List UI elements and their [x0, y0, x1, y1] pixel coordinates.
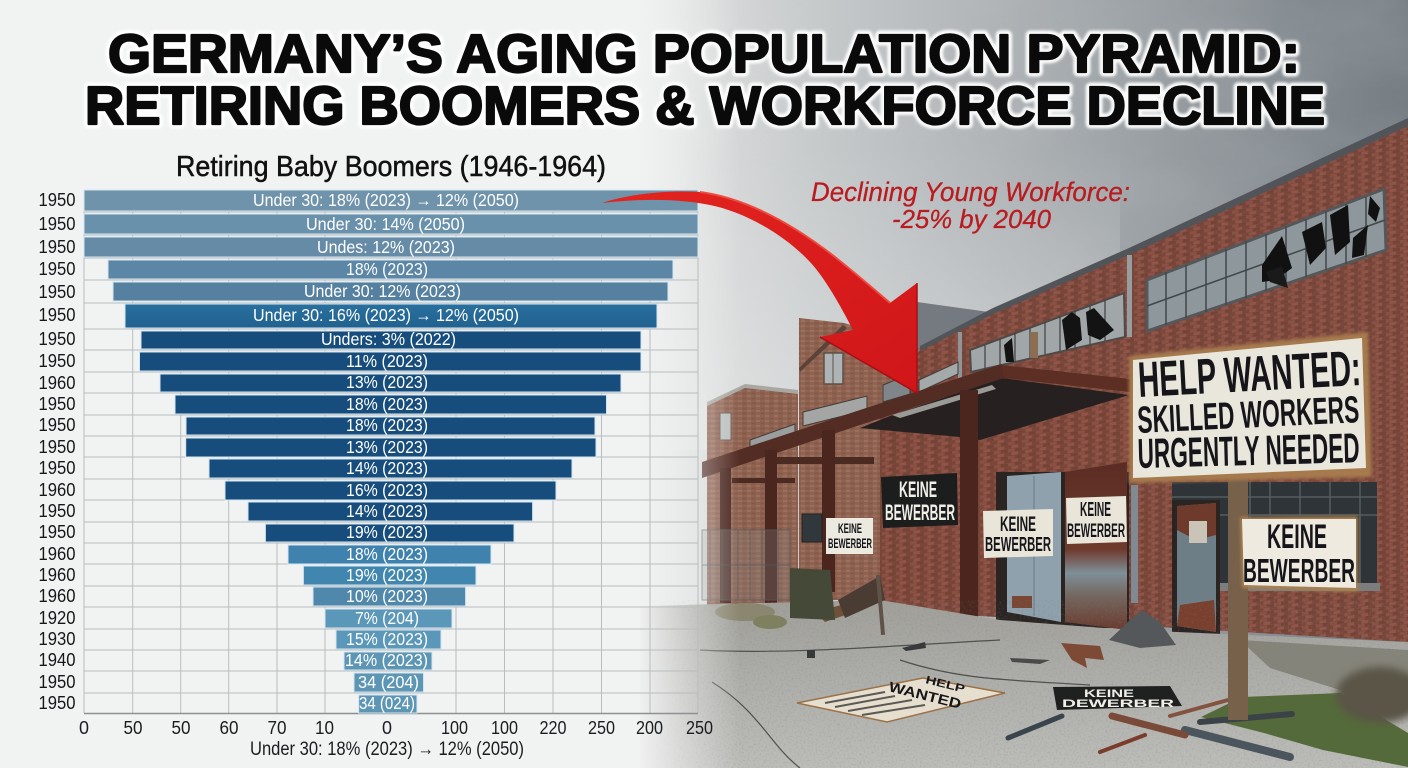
grass strip: [1201, 640, 1408, 767]
year labels: 1950: [38, 672, 76, 692]
year labels: 1950: [38, 522, 76, 542]
pyramid bars: [84, 190, 698, 713]
main brick facade: [880, 118, 1408, 642]
year labels: 1960: [38, 586, 76, 606]
callout: declining young workforce: -25% by 2040: [892, 204, 1052, 234]
concrete ground: [640, 600, 1408, 768]
fallen help wanted sign: WANTED: [887, 678, 963, 712]
x axis labels: 100: [491, 718, 518, 738]
dark grid window lower right: [1172, 482, 1380, 591]
keine bewerber sign on post: [1240, 516, 1358, 592]
callout: declining young workforce: Declining Young Workforce:: [811, 177, 1130, 207]
fallen keine bewerber sign: [1053, 686, 1182, 710]
side door: [1172, 500, 1220, 634]
fallen keine bewerber sign: DEWERBER: [1062, 698, 1174, 710]
year labels: 1960: [38, 565, 76, 585]
year labels: 1950: [38, 437, 76, 457]
x axis labels: 0: [79, 718, 89, 738]
chart heading: Retiring Baby Boomers (1946-1964): [176, 151, 606, 183]
fallen help wanted sign: HELP: [924, 674, 966, 696]
year labels: 1950: [38, 214, 76, 234]
x axis labels: 10: [315, 718, 334, 738]
year labels: 1950: [38, 693, 76, 713]
year labels: 1950: [38, 415, 76, 435]
callout: declining young workforce: [811, 177, 1130, 234]
bar labels: Under 30: 14% (2050): [306, 214, 465, 234]
year labels: 1950: [38, 190, 76, 210]
small keine bewerber sign: KEINE: [838, 520, 862, 536]
fallen keine bewerber sign: KEINE: [1084, 688, 1134, 700]
rusted steel canopy: [702, 364, 1130, 483]
year labels: 1950: [38, 282, 76, 302]
lower small window: [802, 514, 822, 542]
drain pipes: [1127, 255, 1132, 337]
x axis labels: 0: [382, 718, 392, 738]
bar labels: 19% (2023): [346, 565, 428, 585]
keine bewerber sign on post: KEINE: [1267, 518, 1327, 556]
door keine bewerber sign right: KEINE: [1080, 499, 1111, 521]
panel: chart background fade: [0, 0, 740, 768]
dark keine bewerber sign: KEINE: [899, 477, 937, 502]
year labels: 1950: [38, 394, 76, 414]
small keine bewerber sign: BEWERBER: [828, 535, 872, 551]
x axis labels: 50: [172, 718, 190, 738]
scattered tools: [1008, 700, 1292, 757]
axis caption: Under 30: 18% (2023) → 12% (2050): [250, 739, 524, 760]
x axis labels: 250: [588, 718, 615, 738]
small keine bewerber sign: [826, 518, 873, 554]
title: GERMANY’S AGING POPULATION PYRAMID:: [108, 24, 1300, 84]
small windows left wing: [710, 362, 958, 468]
title: [85, 24, 1325, 136]
x axis labels: [79, 718, 713, 738]
broken middle window: [970, 293, 1125, 372]
canopy posts: [720, 390, 978, 644]
year labels: 1950: [38, 351, 76, 371]
doors: [996, 462, 1129, 630]
bar labels: 7% (204): [355, 608, 419, 628]
bar labels: Unders: 3% (2022): [321, 329, 456, 349]
middle gabled building: [799, 302, 989, 600]
title: RETIRING BOOMERS & WORKFORCE DECLINE: [85, 76, 1325, 136]
bar labels: 15% (2023): [346, 629, 428, 649]
x axis labels: 50: [124, 718, 142, 738]
bar labels: 10% (2023): [346, 586, 428, 606]
year labels: 1930: [38, 629, 76, 649]
bar labels: 11% (2023): [346, 351, 428, 371]
year labels: 1950: [38, 501, 76, 521]
door keine bewerber sign right: BEWERBER: [1067, 521, 1125, 542]
bar labels: Under 30: 12% (2023): [304, 281, 461, 301]
x axis labels: 250: [686, 718, 713, 738]
bar labels: 19% (2023): [346, 522, 428, 542]
bar labels: 34 (024): [359, 693, 415, 713]
bar labels: 18% (2023): [346, 259, 428, 279]
chart grid lines: [84, 190, 698, 714]
door keine bewerber sign right: [1066, 496, 1127, 544]
bar labels: 16% (2023): [346, 480, 428, 500]
bar labels: 18% (2023): [346, 544, 428, 564]
bar labels: Under 30: 18% (2023) → 12% (2050): [253, 190, 519, 210]
year labels: 1940: [38, 650, 76, 670]
door keine bewerber sign: KEINE: [1000, 513, 1036, 536]
bar labels: 14% (2023): [345, 650, 428, 670]
x axis labels: 220: [540, 718, 566, 738]
dark keine bewerber sign: [881, 473, 958, 528]
x axis labels: 60: [220, 718, 238, 738]
title: RETIRING BOOMERS & WORKFORCE DECLINE: [85, 76, 1325, 136]
fence: [702, 530, 790, 600]
year labels: 1950: [38, 259, 76, 279]
year labels: 1950: [38, 305, 76, 325]
fallen help wanted sign: [797, 674, 1005, 722]
lower wall: [880, 395, 1129, 610]
far left building: [707, 384, 798, 610]
year labels: 1960: [38, 373, 76, 393]
population pyramid chart: [38, 190, 713, 760]
year labels: 1960: [38, 544, 76, 564]
roof gutter: [920, 118, 1408, 351]
dark keine bewerber sign: BEWERBER: [885, 500, 955, 525]
sign post: [1228, 478, 1248, 720]
x axis labels: 70: [268, 718, 286, 738]
title: GERMANY’S AGING POPULATION PYRAMID:: [108, 24, 1300, 84]
panel: photo of abandoned factory: [646, 0, 1408, 768]
door keine bewerber sign: [983, 509, 1053, 558]
bar labels: 18% (2023): [346, 415, 428, 435]
year labels: [38, 190, 76, 713]
help wanted main sign: [1129, 332, 1372, 483]
x axis labels: 200: [636, 718, 663, 738]
bar labels: 13% (2023): [346, 372, 428, 392]
year labels: 1920: [38, 608, 76, 628]
year labels: 1950: [38, 237, 76, 257]
bar labels: Under 30: 16% (2023) → 12% (2050): [253, 305, 519, 325]
bar labels: 18% (2023): [346, 394, 428, 414]
year labels: 1950: [38, 329, 76, 349]
broken upper right window: [1147, 189, 1386, 331]
rubble and debris: [715, 568, 1176, 668]
year labels: 1960: [38, 480, 76, 500]
bar labels: Undes: 12% (2023): [317, 237, 455, 257]
bar labels: 14% (2023): [346, 458, 428, 478]
year labels: 1950: [38, 458, 76, 478]
door keine bewerber sign: BEWERBER: [985, 534, 1051, 556]
bar labels: 14% (2023): [346, 501, 428, 521]
bar labels: [253, 190, 519, 713]
x axis labels: 100: [441, 718, 468, 738]
red arrow: [602, 191, 917, 393]
bar labels: 13% (2023): [346, 437, 428, 457]
bar labels: 34 (204): [358, 672, 419, 692]
